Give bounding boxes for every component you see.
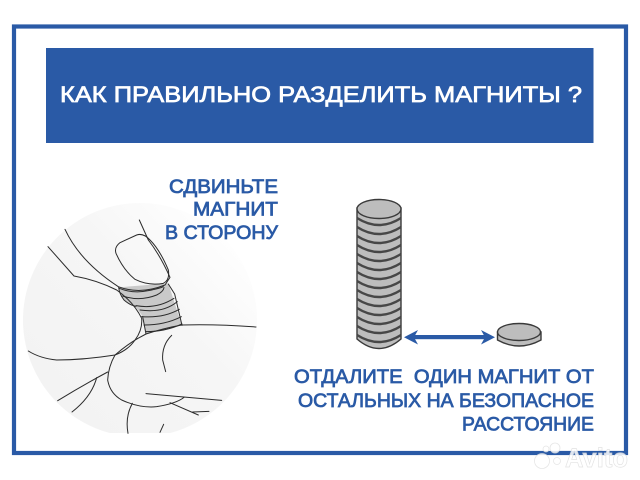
arrow: distance between magnets [404,330,495,344]
watermark: Avito [534,443,628,473]
instruction: move one magnet away: ОСТАЛЬНЫХ НА БЕЗОПАСНОЕ [298,390,594,412]
instruction: slide the magnet: СДВИНЬТЕ [169,176,278,198]
instruction: slide the magnet [165,176,279,244]
watermark: Avito: Avito [565,443,628,473]
title banner [46,48,594,143]
illustration: single magnet [498,324,541,346]
instruction: slide the magnet: МАГНИТ [193,198,278,220]
instruction: slide the magnet: В СТОРОНУ [165,222,279,244]
illustration: fingers holding magnets [23,203,257,437]
illustration: stack of magnets [357,200,401,348]
instruction: move one magnet away: РАССТОЯНИЕ [462,414,594,436]
title: КАК ПРАВИЛЬНО РАЗДЕЛИТЬ МАГНИТЫ ? [60,82,582,107]
instruction: move one magnet away [294,366,594,436]
instruction: move one magnet away: ОТДАЛИТЕ ОДИН МАГНИТ ОТ [294,366,594,388]
